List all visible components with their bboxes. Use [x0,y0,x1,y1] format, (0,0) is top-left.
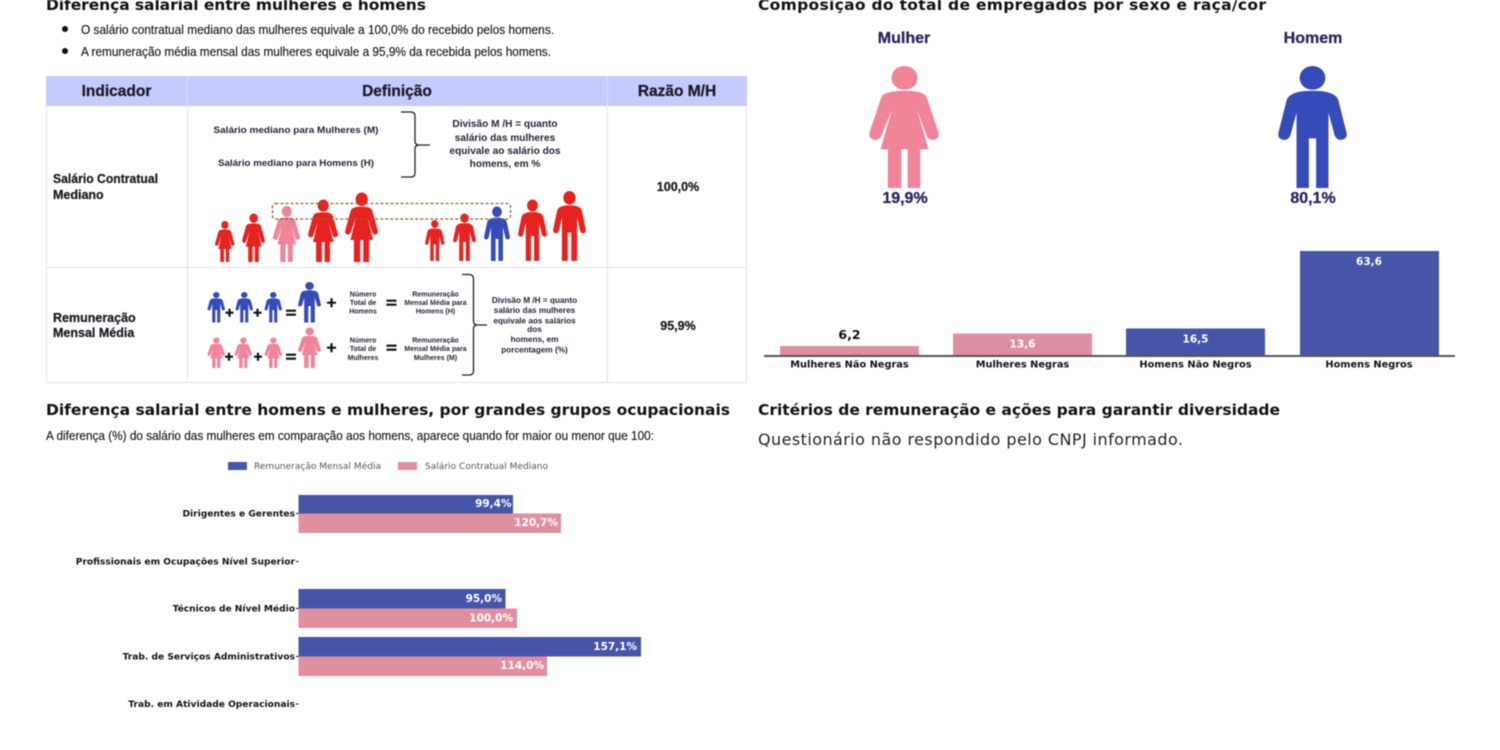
formula: women: Número [350,338,376,344]
icon: woman [869,66,939,188]
bars: serviços administrativos: 114,0% [500,660,544,672]
category labels: Técnicos de Nível Médio [173,604,295,615]
formula: men: Número [350,292,376,298]
bars: técnicos de nível médio: 100,0% [469,612,513,624]
category labels [76,510,298,710]
heading: critérios: Critérios de remuneração e ações para garantir diversidade [758,401,1280,419]
icon: man [1278,66,1347,188]
table header [82,83,716,100]
formula: men: Total de [350,300,376,307]
table header: Indicador [82,83,151,100]
row label: salário contratual mediano: Salário Contratual [53,172,158,186]
category labels: Trab. em Atividade Operacionais [128,700,295,710]
bars: dirigentes e gerentes [298,495,561,533]
definition text: divisão remuneração: equivale aos salários [493,316,576,326]
bar chart: composição por sexo e raça: Homens Não Negros [1139,360,1252,370]
bar chart: composição por sexo e raça: Homens Negros [1325,360,1413,370]
formula: women: Total de [350,346,376,353]
table header: Definição [362,83,432,100]
formula: women: Mulheres [348,355,378,362]
category labels: Profissionais em Ocupações Nível Superior [76,558,296,568]
panel: homem [1278,30,1347,207]
definition text: divisão remuneração: porcentagem (%) [501,346,568,354]
definition text: divisão remuneração: salário das mulheres [494,306,576,315]
icons: men ordered by salary [425,191,586,261]
bars: técnicos de nível médio [298,589,517,628]
definition text: mediano: Salário mediano para Mulheres (M) [214,125,378,136]
panel: homem: Homem [1284,30,1342,47]
category labels: Dirigentes e Gerentes [182,510,295,520]
panel: mulher: 19,9% [882,190,928,207]
panel: mulher [869,30,939,207]
bars: serviços administrativos: 157,1% [593,641,637,653]
definition text: divisão remuneração: Divisão M /H = quanto [492,296,577,305]
chart legend [228,461,548,472]
panel: mulher: Mulher [878,30,930,47]
panel: homem: 80,1% [1290,190,1336,207]
bar chart: composição por sexo e raça: 6,2 [838,327,861,342]
formula: men: Homens [349,308,377,316]
row label: remuneração mensal média: Mensal Média [53,326,135,340]
formula: women: Remuneração [412,338,459,344]
icons: women ordered by salary [215,192,378,262]
definition text: divisão M/H: homens, em % [470,159,540,170]
bar chart: composição por sexo e raça [764,251,1455,370]
bar chart: composição por sexo e raça: 16,5 [1183,334,1208,346]
text block: explicação: A diferença (%) do salário das mulheres em comparação aos homens, aparece quando for maior ou menor que 100: [46,428,654,443]
table header: Razão M/H [638,83,716,100]
definition text: divisão M/H: equivale ao salário dos [449,146,561,157]
row label: remuneração mensal média: Remuneração [53,311,136,325]
bar chart: composição por sexo e raça: 13,6 [1010,338,1035,350]
formula: men: Homens (H) [416,308,455,316]
value: razão salário contratual: 100,0% [657,180,699,194]
formula: men: Mensal Média para [404,300,467,307]
text block: questionário: Questionário não respondido pelo CNPJ informado. [758,430,1183,449]
panel: indicator table [46,76,747,382]
text block: bullet summary: O salário contratual mediano das mulheres equivale a 100,0% do recebido pelos homens. [81,22,554,37]
brace: mediano [401,112,430,177]
bars: serviços administrativos [298,637,641,676]
median highlight box [272,204,510,219]
bars: dirigentes e gerentes: 99,4% [475,498,512,510]
definition text: divisão remuneração: dos [527,325,542,334]
bar chart: composição por sexo e raça: Mulheres Não Negras [790,360,909,370]
definition text: mediano: Salário mediano para Homens (H) [218,158,374,169]
brace: remuneração [462,274,487,375]
row label: salário contratual mediano: Mediano [53,188,104,202]
bar chart: grupos ocupacionais [76,495,641,710]
formula: women [208,328,467,368]
value: razão remuneração: 95,9% [660,319,696,333]
definition text: mediano [214,125,378,169]
formula: men [208,282,467,322]
bar chart: composição por sexo e raça: Mulheres Negras [976,360,1069,370]
text block: bullet summary: A remuneração média mensal das mulheres equivale a 95,9% da recebida pelos homens. [81,44,551,59]
bars: técnicos de nível médio: 95,0% [466,593,502,605]
text block: bullet summary [62,22,554,59]
formula: men: Remuneração [412,292,459,298]
category labels: Trab. de Serviços Administrativos [123,653,295,663]
definition text: divisão M/H: salário das mulheres [455,133,556,144]
definition text: divisão M/H: Divisão M /H = quanto [452,119,558,130]
heading: diferença por grupos ocupacionais: Diferença salarial entre homens e mulheres, por grandes grupos ocupacionais [46,401,730,419]
definition text: divisão remuneração: homens, em [511,335,558,344]
chart legend: Salário Contratual Mediano [425,462,548,472]
formula: women: Mensal Média para [404,346,467,353]
bars: dirigentes e gerentes: 120,7% [514,517,558,529]
formula: women: Mulheres (M) [414,355,457,362]
bar chart: composição por sexo e raça: 63,6 [1356,256,1382,268]
chart legend: Remuneração Mensal Média [254,461,381,472]
